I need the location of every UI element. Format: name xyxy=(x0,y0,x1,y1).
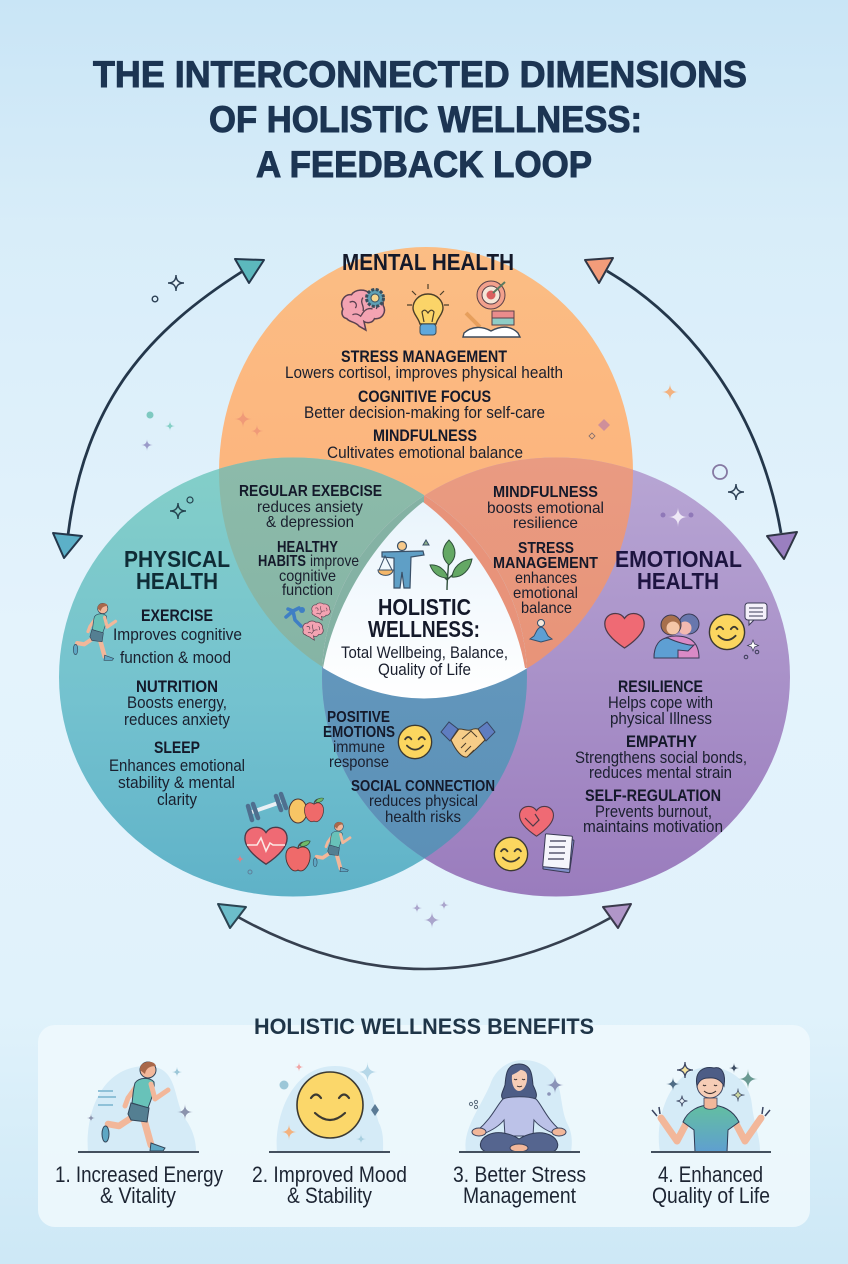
heading: physical health: HEALTH xyxy=(136,568,218,594)
icon: handshake xyxy=(441,722,495,757)
icon: plant xyxy=(430,540,472,590)
panel content: mental health xyxy=(234,249,610,462)
overlap content: mental and physical: & depression xyxy=(266,514,354,531)
centre content: holistic wellness: HOLISTIC xyxy=(378,594,471,620)
heading: benefits: HOLISTIC WELLNESS BENEFITS xyxy=(254,1014,594,1039)
text: mindfulness xyxy=(327,427,523,462)
text: resilience: physical Illness xyxy=(610,710,712,728)
text: resilience xyxy=(608,678,713,728)
icon: heart xyxy=(605,614,644,648)
overlap content: mental and physical: function xyxy=(282,582,333,599)
centre content: holistic wellness xyxy=(341,540,508,679)
text: mindfulness: Cultivates emotional balance xyxy=(327,444,523,462)
label: & Stability xyxy=(287,1183,373,1208)
text: exercise xyxy=(113,607,242,667)
overlap content: mental and physical: cognitive xyxy=(279,568,336,585)
text: nutrition: Boosts energy, xyxy=(127,694,227,712)
overlap: physical and emotional xyxy=(322,496,527,858)
label: 1. Increased Energy xyxy=(55,1162,224,1187)
text: self-regulation xyxy=(583,787,723,836)
benefit 4: quality of life xyxy=(651,1062,771,1208)
overlap content: mental and emotional: emotional xyxy=(513,585,578,602)
text: nutrition: NUTRITION xyxy=(136,678,218,696)
title: A FEEDBACK LOOP xyxy=(256,144,592,185)
overlap content: mental and physical: HABITS xyxy=(258,553,306,570)
label: & Vitality xyxy=(100,1183,177,1208)
text: sleep: SLEEP xyxy=(154,739,200,757)
panel: emotional health circle xyxy=(322,458,790,896)
label xyxy=(55,1162,224,1208)
heading: emotional health: EMOTIONAL xyxy=(615,546,742,572)
overlap: holistic wellness centre xyxy=(322,496,527,698)
title: OF HOLISTIC WELLNESS: xyxy=(209,99,642,140)
icons: dumbbell, fruit, heart, runner xyxy=(236,794,350,874)
sparkle: white star xyxy=(660,507,694,527)
overlap content: physical and emotional xyxy=(323,709,495,826)
overlap content: mental and emotional xyxy=(487,484,604,642)
heading: physical health xyxy=(124,546,230,594)
icon: smiley xyxy=(269,1062,390,1152)
heading: mental health: MENTAL HEALTH xyxy=(342,249,514,275)
text: nutrition xyxy=(124,678,231,729)
overlap content: mental and physical xyxy=(239,483,382,640)
text: exercise: Improves cognitive xyxy=(113,626,242,644)
text: resilience: RESILIENCE xyxy=(618,678,703,696)
icon: brain with gear xyxy=(342,290,384,330)
overlap content: physical and emotional: health risks xyxy=(385,809,461,826)
text: sleep xyxy=(109,739,245,809)
overlap content: mental and emotional: enhances xyxy=(515,570,577,587)
overlap content: physical and emotional: EMOTIONS xyxy=(323,724,395,741)
benefit 2: mood xyxy=(252,1062,407,1208)
text: sleep: stability & mental xyxy=(118,774,235,792)
overlap content: mental and physical: REGULAR EXEBCISE xyxy=(239,483,382,500)
panel content: emotional health xyxy=(494,507,767,873)
label: 4. Enhanced xyxy=(658,1162,763,1187)
overlap content: mental and physical: reduces ansiety xyxy=(257,499,363,516)
icon: runner xyxy=(78,1062,199,1152)
overlap content: mental and emotional: resilience xyxy=(513,515,578,532)
overlap content: physical and emotional: immune xyxy=(333,739,385,756)
panel content: physical health xyxy=(73,497,350,874)
overlap content: mental and emotional: MINDFULNESS xyxy=(493,484,598,501)
heading: emotional health: HEALTH xyxy=(637,568,719,594)
text: sleep: Enhances emotional xyxy=(109,757,245,775)
text: stress management xyxy=(285,348,563,382)
text: self-regulation: maintains motivation xyxy=(583,818,723,836)
icon: smiley with speech bubble xyxy=(709,603,767,659)
icon: runner and brains xyxy=(286,603,330,640)
text: nutrition: reduces anxiety xyxy=(124,711,231,729)
label xyxy=(252,1162,407,1208)
benefit 3: stress xyxy=(453,1060,586,1208)
overlap content: mental and emotional: balance xyxy=(521,600,572,617)
text: resilience: Helps cope with xyxy=(608,694,713,712)
decorative sparkles around the diagram xyxy=(141,275,744,928)
benefit 1: energy xyxy=(55,1062,224,1208)
icon: hugging people xyxy=(654,614,699,658)
panel: physical health circle xyxy=(59,458,527,896)
icon: smiley xyxy=(398,725,432,759)
text: stress management: Lowers cortisol, improves physical health xyxy=(285,364,563,382)
text: exercise: function & mood xyxy=(120,649,231,667)
sparkles on physical circle xyxy=(170,497,193,519)
venn diagram xyxy=(59,247,790,896)
heading: emotional health xyxy=(615,546,742,594)
text: cognitive focus: COGNITIVE FOCUS xyxy=(358,388,491,406)
text: empathy xyxy=(575,733,747,782)
overlap content: mental and physical: HEALTHY xyxy=(277,539,338,556)
overlap content: physical and emotional: response xyxy=(329,754,389,771)
text: stress management: STRESS MANAGEMENT xyxy=(341,348,507,366)
text: self-regulation: SELF-REGULATION xyxy=(585,787,721,805)
title xyxy=(93,54,747,185)
icon: meditating figure xyxy=(530,620,552,642)
title: THE INTERCONNECTED DIMENSIONS xyxy=(93,54,747,95)
label xyxy=(453,1162,586,1208)
overlap content: physical and emotional: reduces physical xyxy=(369,793,478,810)
icon: meditating woman xyxy=(459,1060,580,1152)
text: empathy: EMPATHY xyxy=(626,733,697,751)
centre content: holistic wellness: WELLNESS: xyxy=(368,616,480,642)
icon: light bulb xyxy=(407,284,449,335)
text: cognitive focus: Better decision-making for self-care xyxy=(304,404,545,422)
label: Management xyxy=(463,1183,577,1208)
text: empathy: Strengthens social bonds, xyxy=(575,749,747,767)
label: 3. Better Stress xyxy=(453,1162,586,1187)
icon: runner left xyxy=(73,603,116,660)
sparkles on mental circle xyxy=(234,410,610,439)
arrow: mental to emotional feedback xyxy=(585,258,797,559)
panel: mental health circle xyxy=(219,247,633,697)
arrow: physical to emotional feedback xyxy=(218,904,631,969)
icons: heart handshake, laughing face, notes xyxy=(494,806,574,873)
text: self-regulation: Prevents burnout, xyxy=(595,803,712,821)
label: 2. Improved Mood xyxy=(252,1162,407,1187)
icon: target and book xyxy=(463,281,520,337)
overlap content: mental and emotional: boosts emotional xyxy=(487,500,604,517)
text: exercise: EXERCISE xyxy=(141,607,213,625)
heading: physical health: PHYSICAL xyxy=(124,546,230,572)
overlap: mental and emotional xyxy=(322,458,633,668)
centre content: holistic wellness: Total Wellbeing, Balance, xyxy=(341,644,508,662)
text: cognitive focus xyxy=(304,388,545,422)
panel: holistic wellness benefits xyxy=(38,1014,810,1227)
label xyxy=(652,1162,770,1208)
text: sleep: clarity xyxy=(157,791,198,809)
overlap content: mental and emotional: STRESS xyxy=(518,540,574,557)
text: empathy: reduces mental strain xyxy=(589,764,732,782)
icon: balanced figure with scale xyxy=(378,540,429,588)
text: mindfulness: MINDFULNESS xyxy=(373,427,477,445)
overlap content: mental and physical: improve xyxy=(310,553,359,570)
overlap content: mental and emotional: MANAGEMENT xyxy=(493,555,598,572)
label: Quality of Life xyxy=(652,1183,770,1208)
overlap content: physical and emotional: POSITIVE xyxy=(327,709,390,726)
arrow: physical to mental feedback xyxy=(53,259,264,558)
overlap: mental and physical xyxy=(219,458,424,666)
icon: happy man with sparkles xyxy=(651,1062,771,1152)
centre content: holistic wellness: Quality of Life xyxy=(378,661,471,679)
overlap content: physical and emotional: SOCIAL CONNECTION xyxy=(351,778,495,795)
